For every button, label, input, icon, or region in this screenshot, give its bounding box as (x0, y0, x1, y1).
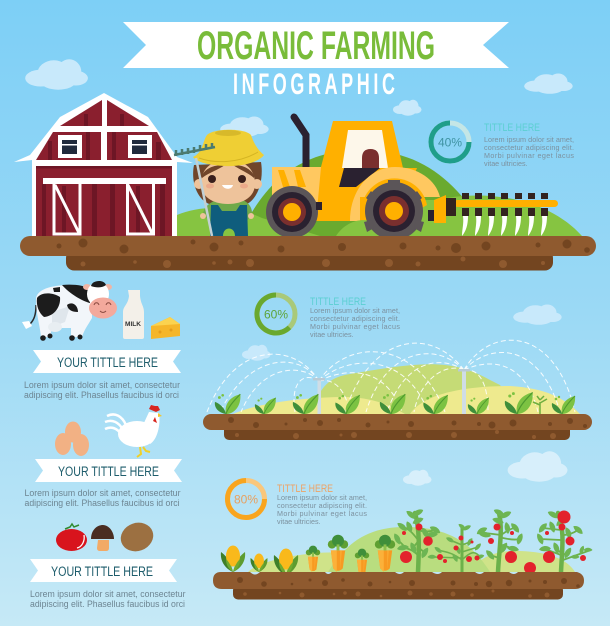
vegetable soil (213, 572, 584, 600)
text panel 40 percent: vitae ultricies. (484, 159, 528, 168)
text block 2: Lorem ipsum dolor sit amet, consectetur (24, 488, 181, 498)
fender (350, 167, 440, 221)
cab (316, 121, 417, 221)
tomato leaves (392, 507, 592, 563)
barn doors (54, 184, 154, 234)
text block 3: Lorem ipsum dolor sit amet, consectetur (30, 589, 186, 599)
text block 1: Lorem ipsum dolor sit amet, consectetur (24, 380, 180, 390)
cow (22, 281, 117, 341)
vegetable hills (248, 527, 575, 572)
tractor hood (272, 167, 325, 221)
text panel 80 percent: vitae ultricies. (277, 517, 321, 526)
seedlings (215, 392, 575, 414)
text panel 60 percent: consectetur adipiscing elit. (310, 314, 400, 323)
donut 40 percent (431, 123, 469, 161)
text panel 80 percent: consectetur adipiscing elit. (277, 501, 367, 510)
icon: tomato (56, 524, 87, 551)
sprinkler water arcs (207, 340, 575, 412)
big wheel (364, 180, 424, 240)
farmer (174, 130, 264, 236)
text block 3: adipiscing elit. Phasellus faucibus id orci (30, 599, 185, 609)
rake (196, 158, 212, 236)
text panel 60 percent: Morbi pulvinar eget lacus (310, 322, 400, 331)
text panel 60 percent (310, 296, 400, 339)
text panel 40 percent (484, 122, 574, 168)
tomatoes (400, 510, 586, 574)
text panel 40 percent: Lorem ipsum dolor sit amet, (484, 135, 574, 144)
small wheel (266, 186, 318, 238)
icon: rooster (105, 405, 162, 457)
icon: potato (117, 518, 157, 556)
donut 80 percent (228, 480, 264, 518)
corn (221, 546, 298, 575)
text panel 40 percent: consectetur adipiscing elit. (484, 143, 574, 152)
ribbon 1 (33, 350, 181, 373)
ribbon 3: YOUR TITTLE HERE (51, 564, 153, 579)
text panel 60 percent: Lorem ipsum dolor sit amet, (310, 306, 400, 315)
text panel 80 percent (277, 483, 367, 526)
donut 80 percent: 80% (234, 492, 258, 506)
ribbon 1: YOUR TITTLE HERE (57, 355, 158, 370)
ribbon 2 (35, 459, 182, 482)
tractor (266, 117, 440, 240)
text panel 80 percent: Morbi pulvinar eget lacus (277, 509, 367, 518)
title: organic farming: ORGANIC FARMING (197, 24, 435, 68)
title banner (123, 22, 509, 68)
tomato stems (397, 513, 588, 572)
icon: eggs (55, 422, 89, 456)
text panel 80 percent: Lorem ipsum dolor sit amet, (277, 493, 367, 502)
irrigation hills (233, 364, 580, 414)
top hills (177, 150, 582, 236)
hat (193, 130, 264, 166)
exhaust pipe (294, 117, 306, 170)
text block 1 (24, 380, 180, 400)
text panel 60 percent: vitae ultricies. (310, 330, 354, 339)
irrigation soil (203, 414, 592, 440)
text block 2: adipiscing elit. Phasellus faucibus id orci (24, 498, 180, 508)
barn (14, 93, 193, 236)
barn windows (58, 135, 152, 158)
ribbon 3 (30, 559, 177, 582)
text block 2 (24, 488, 181, 508)
text block 1: adipiscing elit. Phasellus faucibus id orci (24, 390, 179, 400)
subtitle: INFOGRAPHIC (233, 69, 395, 101)
donut 40 percent: 40% (438, 136, 462, 150)
text panel 40 percent: TITTLE HERE (484, 122, 540, 134)
milk bottle (123, 290, 144, 339)
carrots (306, 535, 395, 575)
tomato plants (392, 507, 592, 574)
sprinklers (313, 369, 470, 414)
text panel 80 percent: TITTLE HERE (277, 483, 333, 495)
barn stripes (36, 114, 172, 236)
milk label: MILK (125, 321, 141, 328)
icon: mushroom (91, 525, 114, 551)
text panel 40 percent: Morbi pulvinar eget lacus (484, 151, 574, 160)
text panel 60 percent: TITTLE HERE (310, 296, 366, 308)
cultivator (428, 193, 558, 236)
text block 3 (30, 589, 186, 609)
donut 60 percent (257, 295, 295, 333)
cheese (151, 317, 180, 339)
top soil (20, 236, 596, 270)
clouds (25, 59, 573, 486)
ribbon 2: YOUR TITTLE HERE (58, 464, 159, 479)
donut 60 percent: 60% (264, 308, 288, 322)
